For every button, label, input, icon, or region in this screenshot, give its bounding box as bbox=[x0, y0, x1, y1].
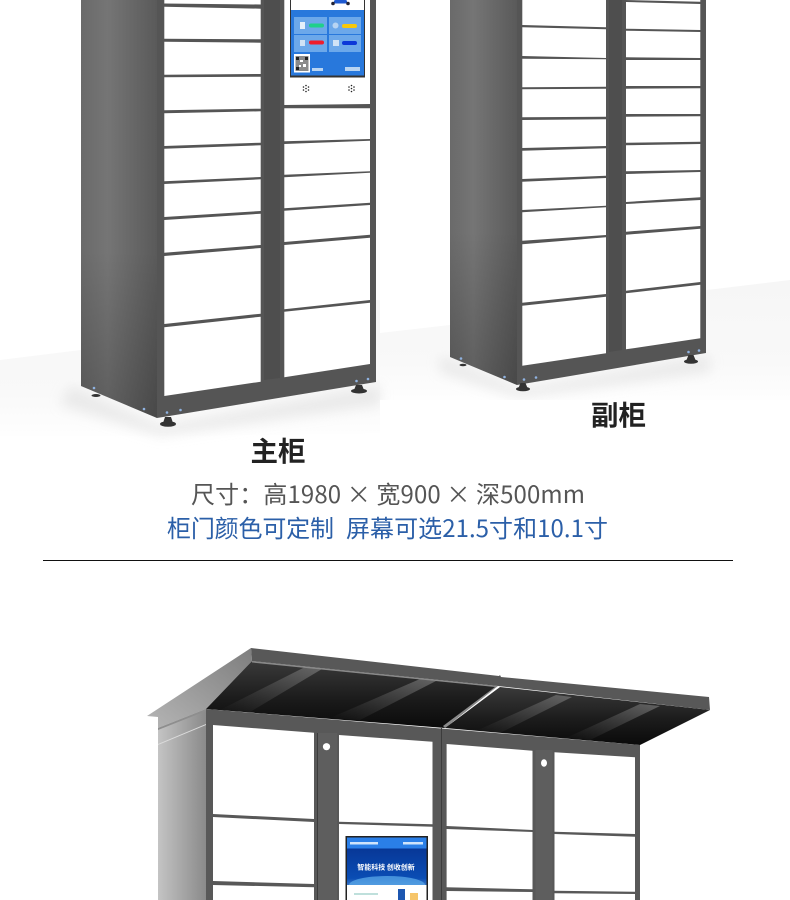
speaker right bbox=[348, 85, 355, 92]
customization text: 屏幕可选21.5寸和10.1寸 bbox=[346, 509, 608, 544]
cabinet side panel bbox=[81, 0, 157, 418]
feet bbox=[92, 385, 367, 427]
floor background bbox=[0, 280, 790, 440]
lock strip 2 bbox=[536, 750, 552, 900]
outdoor locker with canopy bbox=[147, 648, 710, 900]
canopy underside left bbox=[206, 661, 497, 728]
left column doors bbox=[522, 0, 606, 366]
cabinet front frame bbox=[157, 0, 376, 418]
door column 1 bbox=[213, 725, 314, 900]
cabinet side panel bbox=[450, 0, 517, 385]
right column doors bbox=[284, 108, 370, 377]
main cabinet bbox=[81, 0, 376, 427]
body frame bbox=[206, 709, 640, 900]
screws bbox=[93, 378, 369, 414]
label: secondary cabinet: 副柜 bbox=[591, 393, 646, 433]
customization text: 柜门颜色可定制 bbox=[167, 509, 334, 544]
control panel bbox=[284, 0, 370, 105]
customization text bbox=[167, 509, 608, 544]
right column doors bbox=[626, 0, 700, 349]
QR code bbox=[294, 54, 310, 72]
speaker left bbox=[303, 85, 309, 92]
door column 4 bbox=[554, 752, 635, 900]
secondary cabinet bbox=[450, 0, 706, 391]
label: main cabinet: 主柜 bbox=[250, 429, 306, 469]
dimensions text: 尺寸：高1980 × 宽900 × 深500mm bbox=[191, 475, 585, 510]
canopy underside right bbox=[445, 687, 710, 745]
door column 3 bbox=[447, 744, 532, 900]
body side panel bbox=[158, 709, 206, 900]
screen headline: 智能科技 创收创新 bbox=[357, 862, 415, 872]
centre post bbox=[441, 728, 442, 900]
cabinet front frame bbox=[517, 0, 706, 385]
feet bbox=[460, 355, 698, 391]
door column 2 bbox=[339, 735, 432, 900]
canopy sloped side bbox=[147, 648, 252, 728]
advertising screen bbox=[346, 836, 428, 900]
section divider bbox=[43, 560, 733, 561]
lock strip 1 bbox=[317, 733, 337, 900]
left column doors bbox=[164, 0, 261, 396]
touch screen bbox=[290, 0, 365, 78]
canopy top fascia bbox=[251, 648, 710, 710]
screws bbox=[460, 349, 700, 381]
